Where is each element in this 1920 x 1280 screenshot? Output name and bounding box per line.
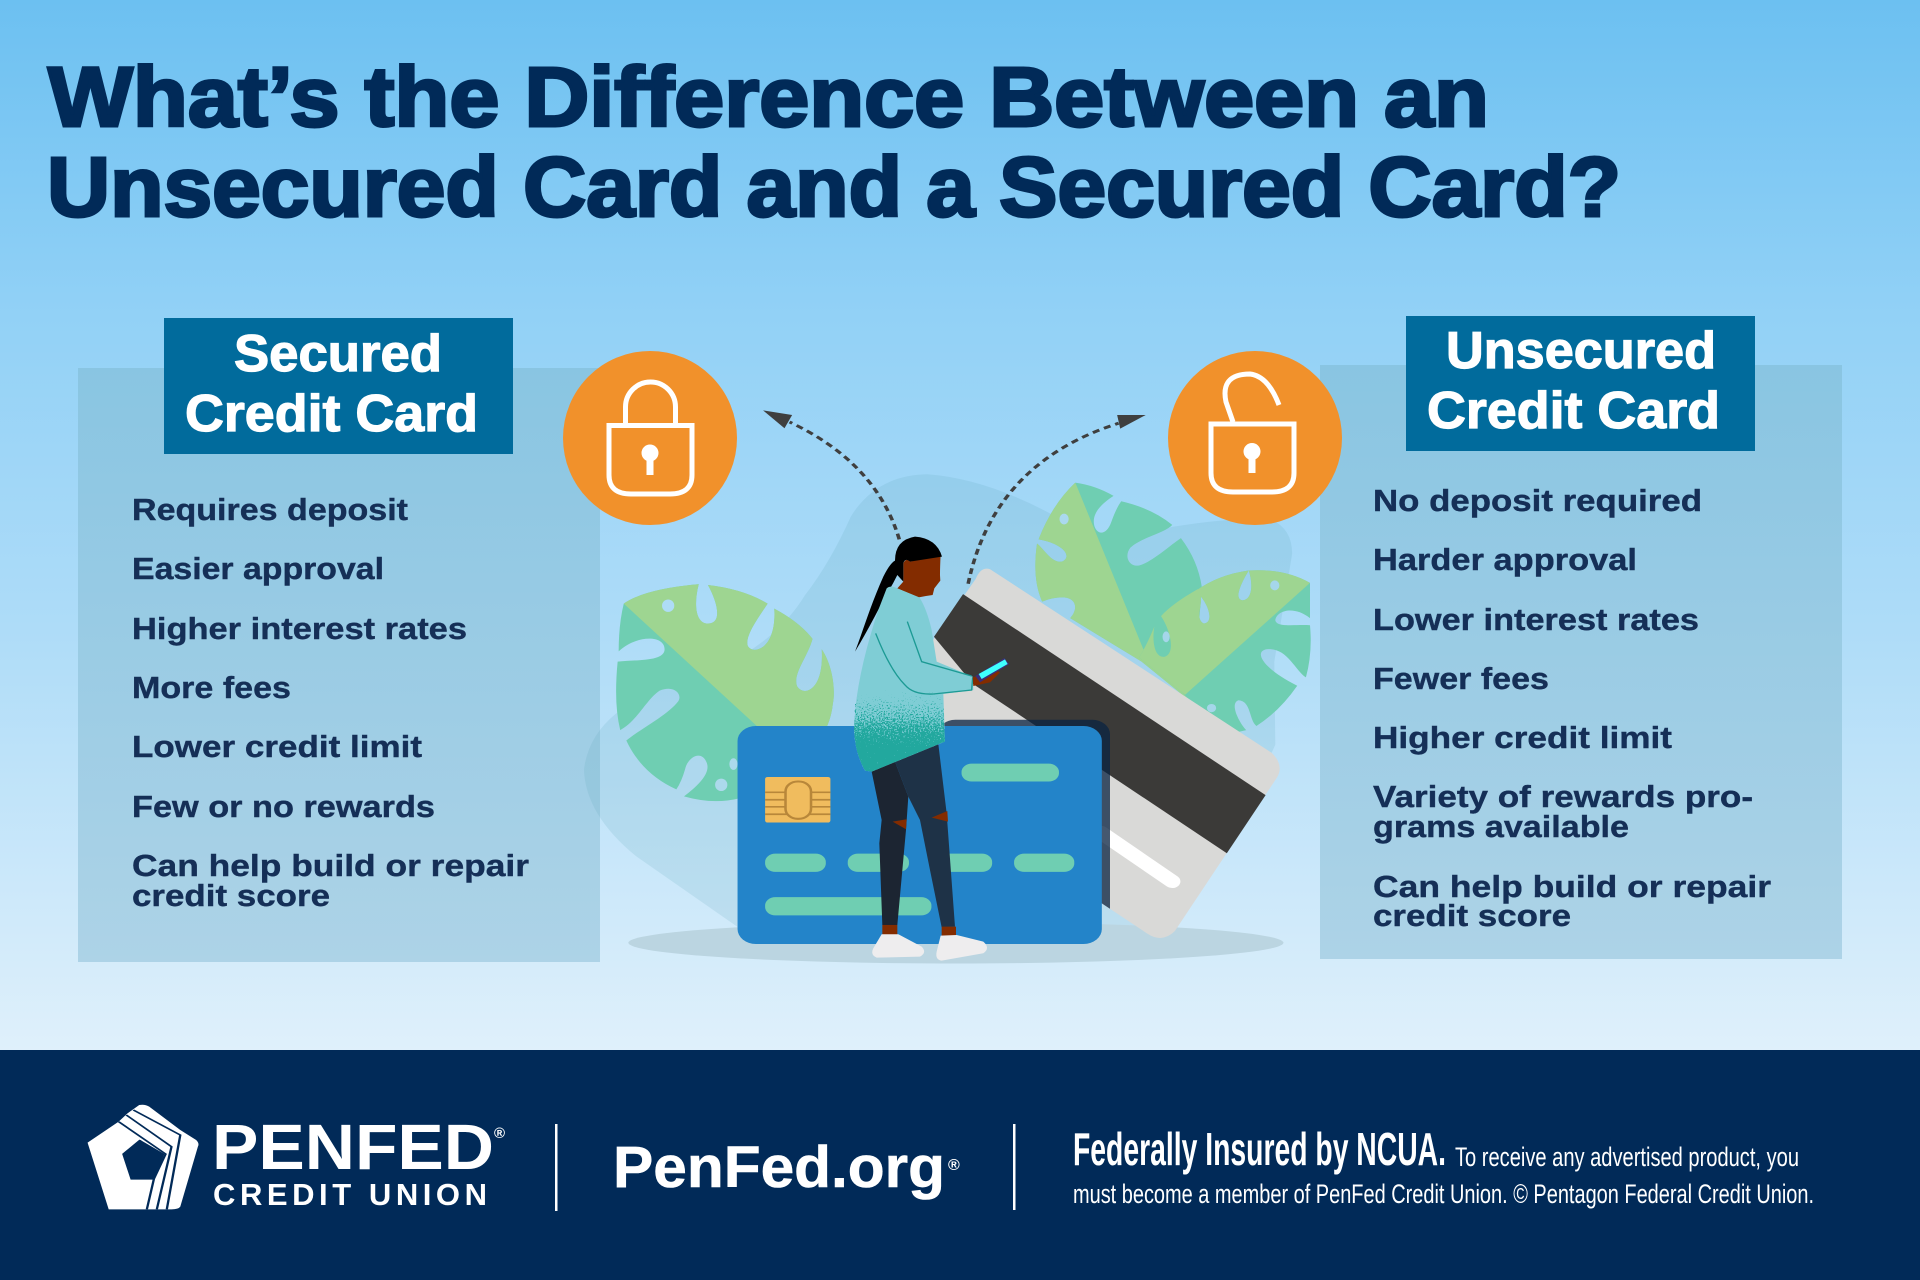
website: PenFed.org: PenFed.org: [613, 1135, 945, 1200]
front of credit card: [738, 726, 1102, 944]
panel: unsecured credit card: [1320, 316, 1842, 959]
divider: [555, 1124, 558, 1211]
list: secured features: Higher interest rates: [132, 611, 467, 646]
icon: locked padlock: [563, 351, 737, 525]
footer band: [0, 1050, 1920, 1280]
heading: unsecured credit card: Credit Card: [1427, 382, 1720, 440]
background blob: [584, 474, 1292, 951]
card chip: [765, 777, 830, 823]
sweater speckled hem: [854, 690, 945, 772]
logo text: PenFed Credit Union: CREDIT UNION: [213, 1177, 487, 1212]
list: unsecured features: Harder approval: [1373, 542, 1637, 577]
heading: secured credit card: Credit Card: [185, 385, 478, 443]
logo: PenFed pentagon: [88, 1105, 198, 1209]
list: secured features: [132, 492, 529, 913]
list: unsecured features: Variety of rewards pro-: [1373, 779, 1753, 814]
title: [47, 50, 1621, 234]
website: PenFed.org: ®: [948, 1157, 960, 1174]
panel: secured credit card: [78, 318, 600, 962]
title: Unsecured Card and a Secured Card?: [47, 140, 1621, 234]
arrow: to unsecured card: [968, 415, 1146, 584]
logo text: PenFed Credit Union: PENFED: [212, 1111, 494, 1183]
list: secured features: Can help build or repair: [132, 848, 529, 883]
legal disclaimer: [1073, 1123, 1814, 1209]
leaf top right: [1035, 482, 1202, 700]
illustration: woman with phone: [854, 537, 1009, 961]
front card shadow: [944, 720, 1110, 909]
logo text: PenFed Credit Union: ®: [494, 1125, 505, 1142]
legal disclaimer: To receive any advertised product, you: [1455, 1142, 1799, 1172]
list: unsecured features: credit score: [1373, 898, 1571, 933]
jeans: [872, 744, 955, 927]
list: secured features: Requires deposit: [132, 492, 408, 527]
list: unsecured features: No deposit required: [1373, 483, 1702, 518]
list: unsecured features: Can help build or repair: [1373, 869, 1771, 904]
panel background: secured: [78, 368, 600, 962]
list: secured features: More fees: [132, 670, 291, 705]
hand and phone: [973, 658, 1009, 686]
icon: unlocked padlock: [1168, 351, 1342, 525]
list: unsecured features: Fewer fees: [1373, 661, 1549, 696]
list: unsecured features: Higher credit limit: [1373, 720, 1672, 755]
head and hair: [855, 537, 942, 652]
ankles and shoes: [872, 925, 987, 961]
panel background: unsecured: [1320, 365, 1842, 959]
title: What’s the Difference Between an: [48, 50, 1489, 144]
arrow: to secured card: [763, 410, 899, 539]
list: secured features: credit score: [132, 878, 330, 913]
back of credit card: [933, 568, 1280, 938]
legal disclaimer: Federally Insured by NCUA.: [1073, 1123, 1446, 1175]
ground shadow: [628, 922, 1283, 964]
illustration: cards, leaves and arrows: [584, 410, 1315, 964]
list: secured features: Easier approval: [132, 551, 384, 586]
heading: secured credit card: [164, 318, 513, 454]
leaf right: [1139, 570, 1311, 732]
signature stripe: [1101, 832, 1172, 881]
list: unsecured features: grams available: [1373, 809, 1629, 844]
divider: [1013, 1124, 1016, 1210]
heading: secured credit card: Secured: [234, 325, 442, 383]
list: unsecured features: [1373, 483, 1771, 933]
magnetic stripe: [934, 594, 1266, 853]
leaf left: [616, 584, 834, 802]
list: secured features: Few or no rewards: [132, 789, 435, 824]
list: secured features: Lower credit limit: [132, 729, 422, 764]
sweater: [854, 587, 973, 772]
heading: unsecured credit card: [1406, 316, 1755, 451]
logo text: PenFed Credit Union: [212, 1111, 505, 1212]
heading: unsecured credit card: Unsecured: [1446, 322, 1716, 380]
card bars: [765, 764, 1074, 915]
list: unsecured features: Lower interest rates: [1373, 602, 1699, 637]
